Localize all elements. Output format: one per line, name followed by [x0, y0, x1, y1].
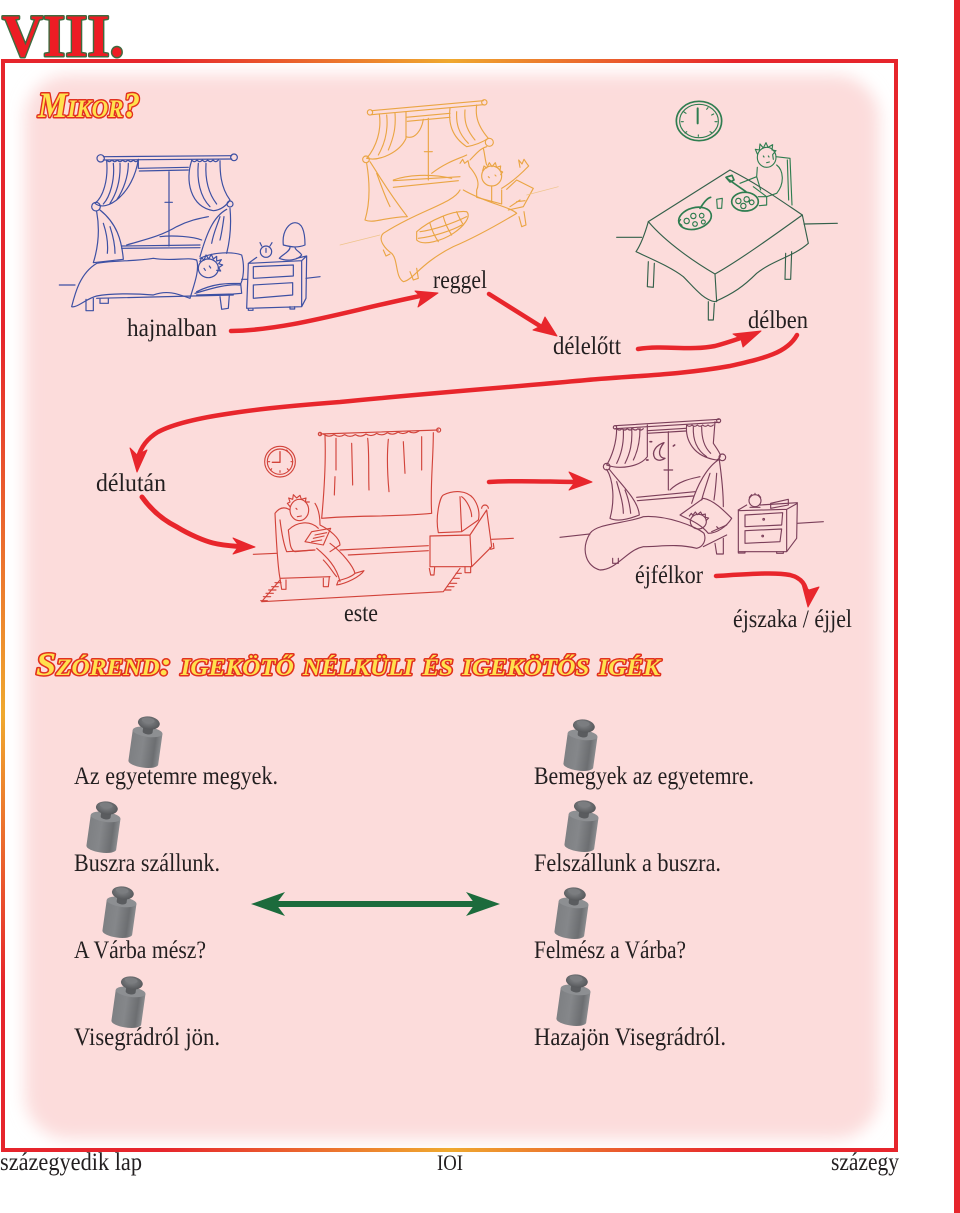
- footer: left: százegyedik lap: [0, 1149, 142, 1176]
- arrow: délben to délután: [130, 335, 797, 472]
- label: este: este: [344, 600, 378, 627]
- illustration: midnight bedroom (purple): [560, 419, 823, 570]
- label: hajnalban: hajnalban: [127, 315, 217, 342]
- sentence: Hazajön Visegrádról.: [534, 1024, 726, 1051]
- pink panel background: [25, 75, 879, 1139]
- sentence: Visegrádról jön.: [74, 1024, 220, 1051]
- label: délután: délután: [96, 470, 166, 497]
- sentence: Az egyetemre megyek.: [74, 763, 278, 790]
- footer: page number: IOI: [437, 1150, 463, 1175]
- weight icon: [86, 799, 123, 855]
- arrow: este to éjfélkor: [489, 472, 592, 490]
- weight icon: [128, 714, 165, 770]
- arrow: éjfélkor to éjszaka: [716, 573, 819, 607]
- wall clock at noon: [676, 101, 722, 141]
- heading: Mikor?: Mikor?: [37, 85, 140, 125]
- label: éjfélkor: éjfélkor: [635, 562, 704, 589]
- sentence: Felszállunk a buszra.: [534, 850, 721, 877]
- label: éjszaka / éjjel: éjszaka / éjjel: [733, 606, 852, 633]
- illustration: lunch at table (green): [617, 101, 837, 320]
- left sentences: [74, 714, 278, 1051]
- weight icon: [563, 717, 600, 773]
- arrow: délelőtt to délben: [638, 331, 761, 349]
- sentence: Buszra szállunk.: [74, 850, 220, 877]
- chapter title: VIII.: [2, 3, 124, 69]
- label: délben: délben: [748, 307, 808, 334]
- illustration: dawn bedroom (blue): [59, 154, 320, 311]
- label: reggel: reggel: [433, 267, 487, 294]
- illustration: evening living room (red): [253, 428, 513, 602]
- weight icon: [102, 884, 139, 940]
- weight icon: [111, 974, 148, 1030]
- weight icon: [564, 798, 601, 854]
- arrow: reggel to délelőtt: [489, 294, 557, 336]
- green double arrow: [251, 892, 500, 916]
- footer: right: százegy: [831, 1149, 899, 1176]
- sentence: A Várba mész?: [74, 937, 206, 964]
- right sentences: [534, 717, 754, 1051]
- weight icon: [554, 885, 591, 941]
- heading: Szórend: Szórend: igekötő nélküli és igekötős igék: [36, 647, 662, 683]
- sentence: Bemegyek az egyetemre.: [534, 763, 754, 790]
- arrow: délután to este: [142, 497, 255, 554]
- illustration: waking up (orange): [340, 100, 558, 282]
- arrow: hajnalban to reggel: [231, 291, 438, 331]
- page edge red line: [954, 0, 960, 1213]
- sentence: Felmész a Várba?: [534, 937, 686, 964]
- label: délelőtt: délelőtt: [553, 333, 621, 360]
- weight icon: [556, 972, 593, 1028]
